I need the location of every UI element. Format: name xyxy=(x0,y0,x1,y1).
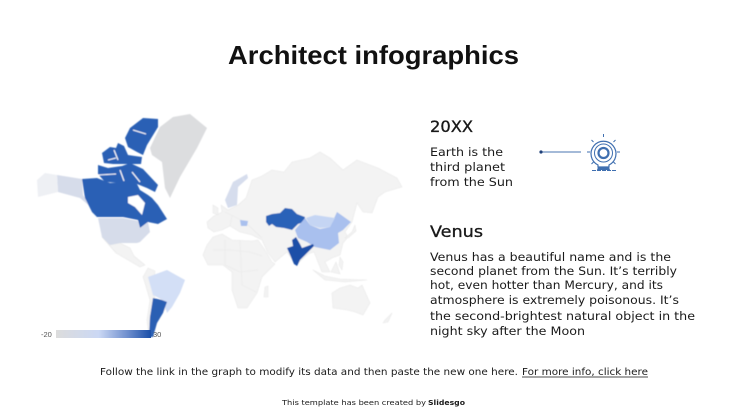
map: Brazil xyxy=(148,270,185,313)
map: unselected countries xyxy=(102,152,402,337)
map: Argentina xyxy=(149,298,167,337)
map: Canada xyxy=(82,118,167,228)
text block: Venus description: second planet from the Sun. It’s terribly xyxy=(430,264,677,278)
map: India xyxy=(287,237,314,266)
map: Alaska xyxy=(57,175,92,208)
credit line: Slidesgo xyxy=(428,399,465,407)
text block: Earth xyxy=(430,145,513,189)
title: Architect infographics xyxy=(228,40,519,70)
map: United States xyxy=(98,218,150,245)
arrow: connector line xyxy=(539,150,581,154)
icon: light bulb gear xyxy=(587,134,620,170)
text block: Venus description: the second-brightest natural object in the xyxy=(430,309,695,323)
text block: Earth: from the Sun xyxy=(430,175,513,189)
map: Hudson Bay xyxy=(128,195,145,215)
map: Scandinavia xyxy=(225,174,248,208)
text block: Venus description: Venus has a beautiful name and is the xyxy=(430,250,671,264)
map: Alaska west xyxy=(37,173,58,197)
text block: Venus description: atmosphere is extremely poisonous. It’s xyxy=(430,293,679,307)
map legend: -20 xyxy=(41,330,52,339)
heading: Venus: Venus xyxy=(430,222,483,241)
footer note with link: For more info, click here xyxy=(522,367,648,378)
map legend xyxy=(41,330,161,339)
footer note with link: Follow the link in the graph to modify its data and then paste the new one here. xyxy=(100,367,518,378)
map legend: 30 xyxy=(153,330,161,339)
text block: Earth: Earth is the xyxy=(430,145,503,159)
map: Canadian Arctic channels xyxy=(98,130,146,182)
map: Turkey area xyxy=(240,220,248,226)
credit line xyxy=(281,399,465,407)
map: Mongolia xyxy=(306,215,335,228)
text block: Venus description: night sky after the Moon xyxy=(430,324,585,338)
map: Kazakhstan xyxy=(266,208,305,230)
world map chart xyxy=(37,114,402,337)
text block: Earth: third planet xyxy=(430,160,506,174)
footer note with link xyxy=(100,367,648,378)
credit line: This template has been created by xyxy=(281,399,426,407)
heading: 20XX: 20XX xyxy=(430,117,473,136)
map: Greenland xyxy=(150,114,207,198)
map: China xyxy=(295,212,351,250)
text block: Venus description: hot, even hotter than Mercury, and its xyxy=(430,278,663,292)
text block: Venus description xyxy=(430,250,695,338)
